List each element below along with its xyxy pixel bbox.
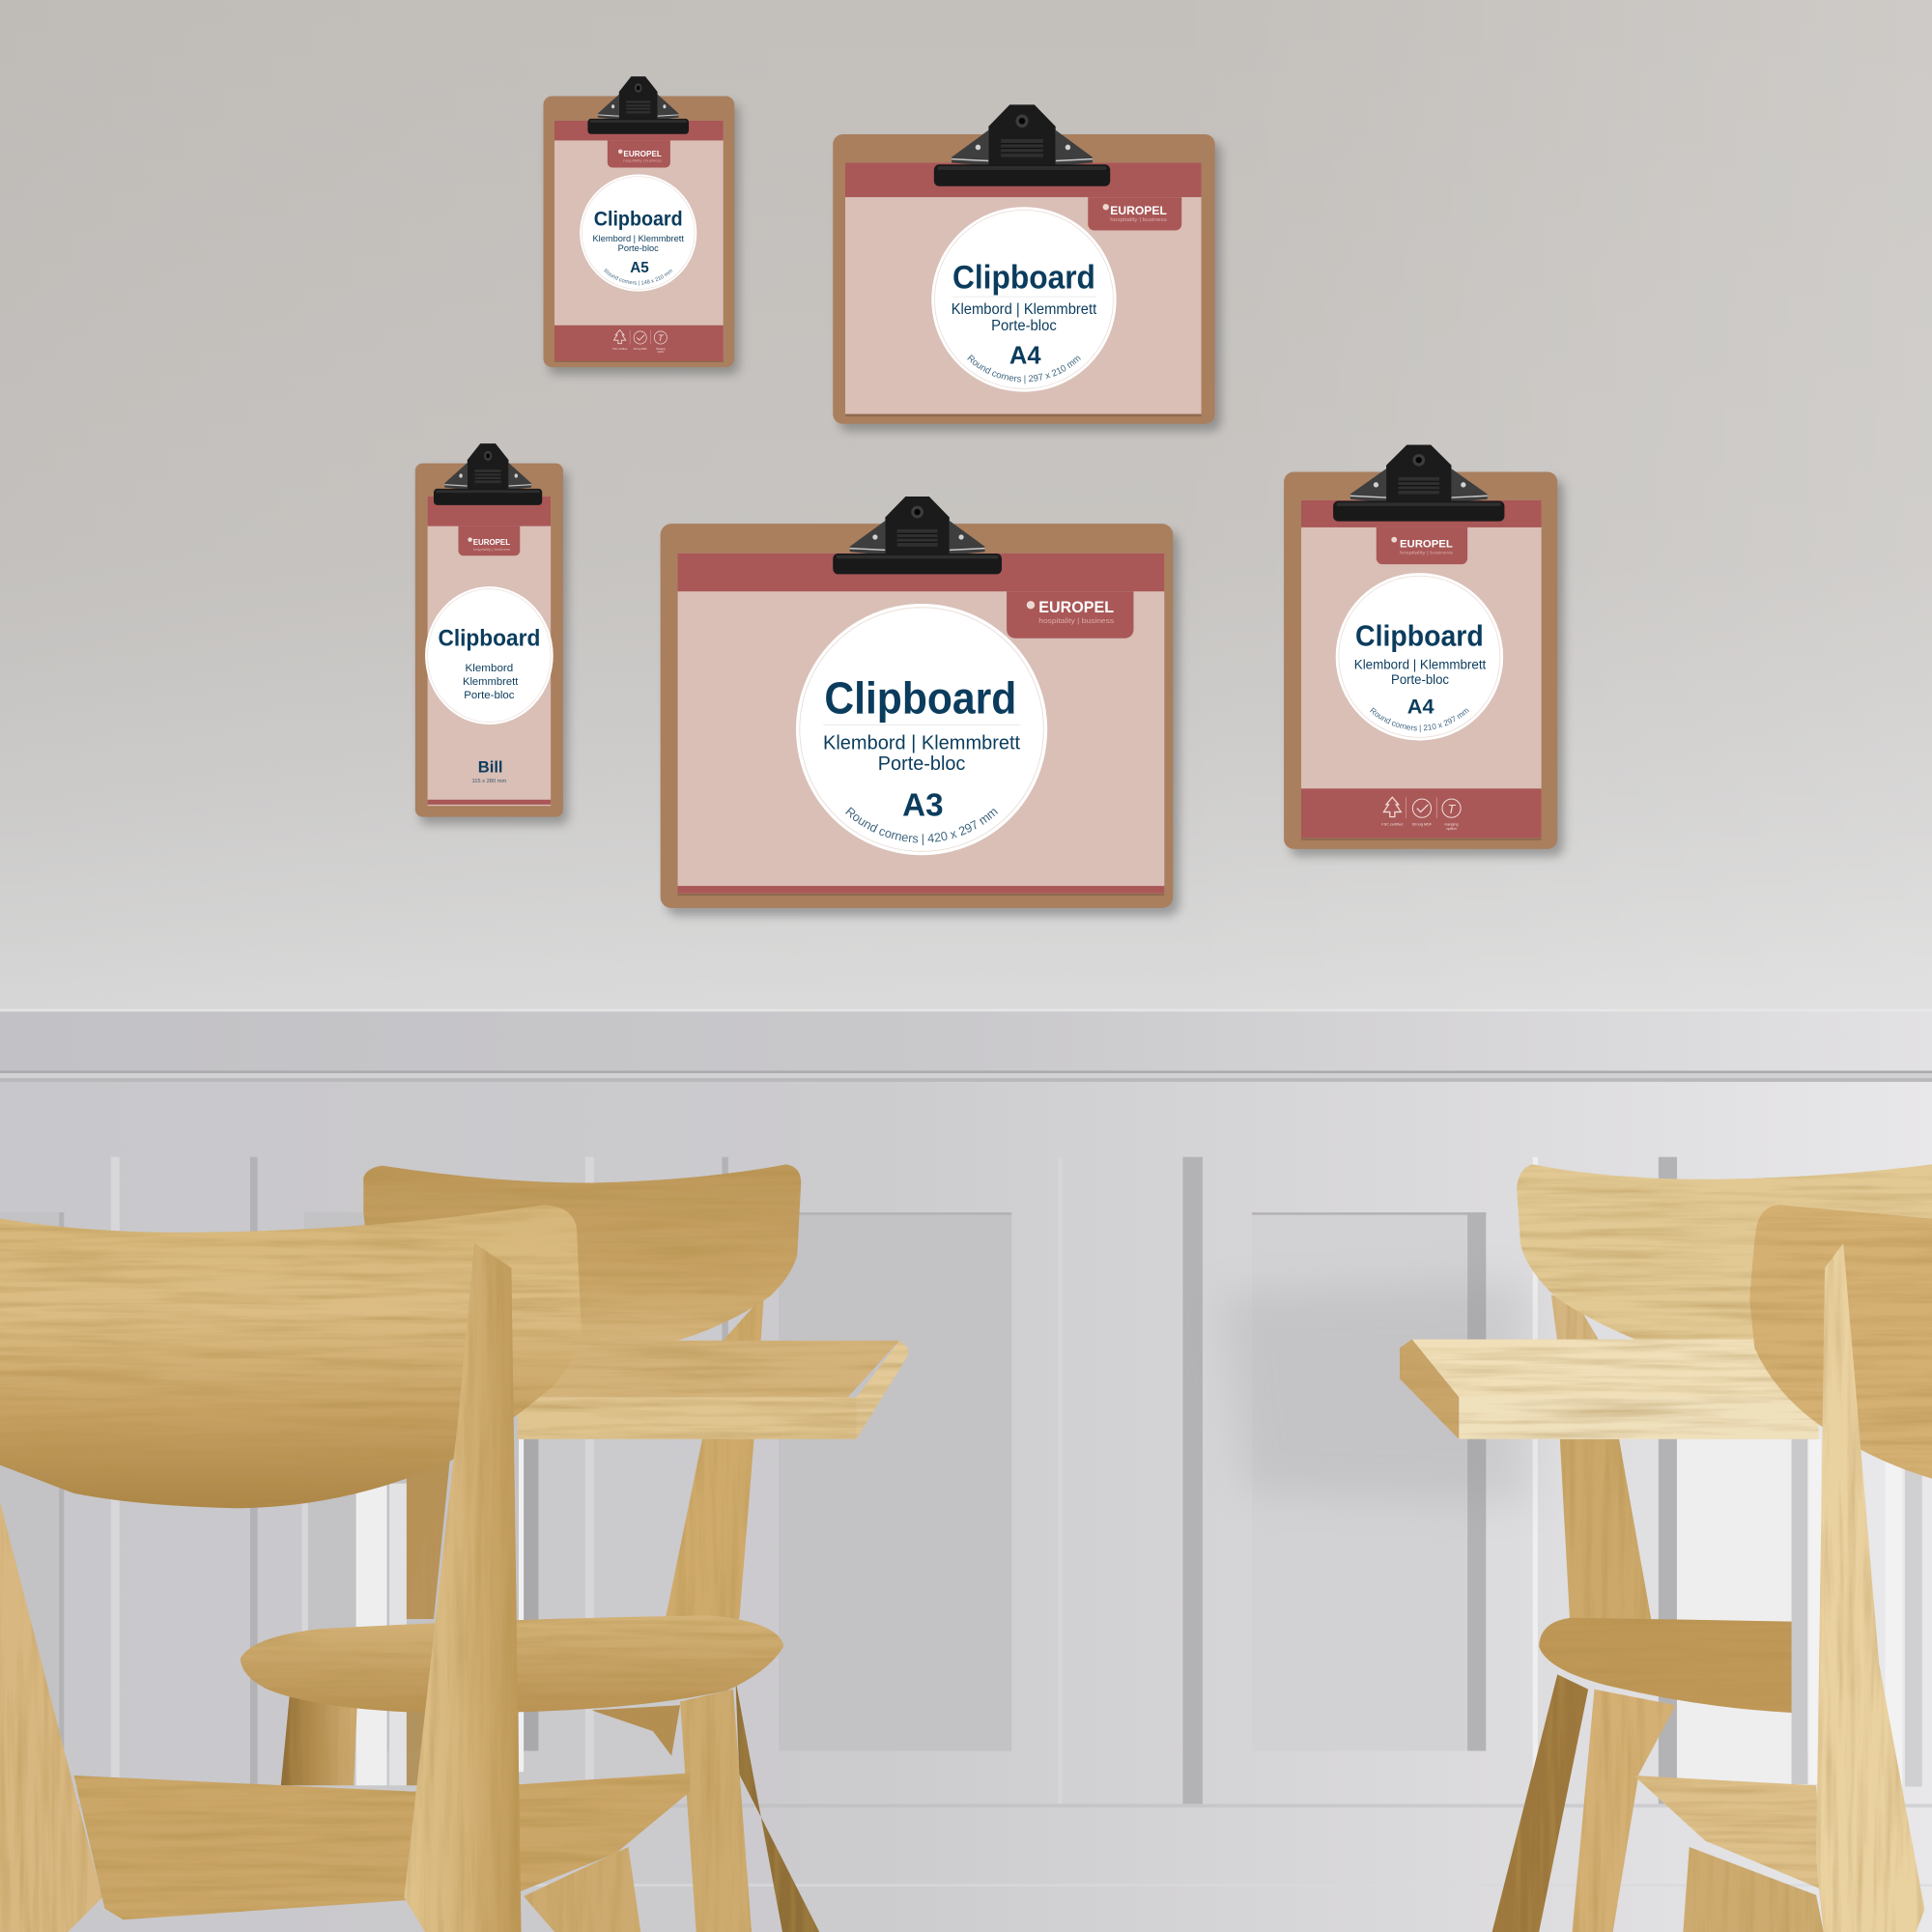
wall panels	[0, 1157, 1932, 1887]
board	[833, 134, 1221, 431]
logo tab	[1088, 197, 1181, 231]
certification icons	[612, 330, 667, 354]
clipboard: A3	[661, 497, 1184, 921]
label circle	[931, 207, 1117, 392]
label circle: Round corners | 148 x 210 mm	[604, 269, 672, 286]
certification icons: Strong MDF	[634, 347, 647, 351]
clip	[587, 76, 689, 134]
logo tab: hospitality | business	[473, 548, 510, 552]
back chair: seat	[241, 1615, 783, 1713]
label circle: Clipboard	[824, 673, 1016, 724]
board	[543, 96, 739, 375]
label circle: A4	[1407, 695, 1435, 719]
logo tab	[1377, 527, 1467, 564]
clipboard: A5	[543, 76, 744, 379]
table	[518, 1341, 908, 1439]
board	[415, 464, 568, 824]
clipboard: A4 landscape	[833, 104, 1226, 436]
back chair: seat	[1539, 1618, 1792, 1713]
label circle: Round corners | 210 x 297 mm	[1370, 707, 1469, 732]
label circle: Porte-bloc	[1391, 671, 1449, 687]
logo tab	[458, 526, 520, 555]
logo tab: EUROPEL	[1400, 538, 1453, 550]
back chair: rear legs	[1492, 1295, 1676, 1932]
wainscot panelling	[0, 1009, 1932, 1932]
logo tab: EUROPEL	[1038, 598, 1114, 616]
certification icons: FSC certified	[1381, 823, 1403, 827]
logo tab	[608, 140, 670, 167]
label circle: Porte-bloc	[464, 690, 515, 701]
label circle: Klembord | Klemmbrett	[593, 234, 684, 244]
board	[661, 524, 1179, 916]
label circle: A3	[902, 787, 944, 823]
white radiator bars	[356, 1439, 1922, 1786]
label circle: Klembord | Klemmbrett	[1354, 657, 1486, 672]
wall background	[0, 0, 1932, 1012]
logo tab	[1007, 591, 1133, 639]
front chair: side leg	[0, 1502, 102, 1932]
label circle: Round corners | 297 x 210 mm	[967, 355, 1081, 384]
certification icons: option	[1446, 827, 1457, 831]
label circle	[425, 586, 554, 724]
size label: 115 x 280 mm	[471, 779, 507, 784]
front chair: post	[1816, 1243, 1924, 1932]
rail moulding	[0, 1009, 1932, 1082]
logo tab: hospitality | business	[1038, 618, 1115, 625]
label circle: Klembord | Klemmbrett	[952, 301, 1097, 318]
certification icons: Hanging	[1444, 823, 1459, 827]
logo tab: hospitality | business	[1400, 550, 1454, 555]
label circle: Clipboard	[438, 625, 540, 650]
label circle: Porte-bloc	[878, 753, 965, 775]
paper	[1301, 500, 1542, 840]
label circle: Clipboard	[594, 208, 683, 230]
paper	[678, 554, 1164, 895]
certification icons: Hanging	[656, 347, 666, 351]
front chair: backrest	[0, 1205, 582, 1508]
board	[1284, 472, 1564, 856]
front chair: under seat leg	[524, 1847, 640, 1932]
certification icons: Strong MDF	[1412, 823, 1433, 827]
label circle	[1335, 573, 1503, 741]
paper	[845, 162, 1202, 416]
label circle: A5	[630, 260, 649, 276]
front chair: seat	[1634, 1776, 1824, 1890]
clipboard: A4 portrait	[1284, 444, 1569, 862]
table	[1400, 1339, 1819, 1439]
certification icons: option	[657, 350, 665, 354]
label circle: Klemmbrett	[463, 676, 519, 688]
label circle: Klembord	[466, 663, 513, 674]
logo tab: hospitality | business	[623, 159, 662, 163]
left furniture group	[0, 1164, 908, 1932]
label circle: Porte-bloc	[991, 318, 1057, 334]
table shadow on wall	[1220, 1282, 1528, 1503]
clipboard: Bill	[415, 443, 568, 824]
label circle: Klembord | Klemmbrett	[823, 733, 1020, 754]
logo tab: EUROPEL	[623, 149, 662, 158]
front chair: backrest	[1749, 1205, 1932, 1479]
clip	[833, 497, 1002, 574]
label circle	[796, 604, 1047, 856]
paper	[554, 121, 724, 362]
certification icons: T	[658, 333, 664, 343]
right furniture group	[1400, 1164, 1932, 1932]
front chair: post	[404, 1243, 522, 1932]
label circle: A4	[1009, 342, 1041, 369]
certification icons	[1381, 797, 1461, 831]
cap rail	[0, 1010, 1932, 1072]
clip	[934, 104, 1110, 186]
clip	[434, 443, 542, 505]
certification icons: FSC certified	[612, 347, 628, 351]
back chair: rear legs	[281, 1295, 819, 1932]
certification icons: T	[1448, 802, 1457, 816]
label circle: Round corners | 420 x 297 mm	[845, 807, 998, 846]
clip	[1333, 444, 1504, 522]
label circle: Porte-bloc	[618, 243, 659, 254]
back chair: backrest	[1517, 1164, 1932, 1355]
logo tab: hospitality | business	[1110, 217, 1167, 223]
front chair: seat	[74, 1773, 690, 1919]
logo tab: EUROPEL	[473, 537, 510, 547]
size label: Bill	[478, 758, 503, 777]
label circle: Clipboard	[1355, 619, 1484, 652]
label circle	[580, 174, 697, 292]
logo tab: EUROPEL	[1110, 204, 1167, 217]
back chair: backrest	[363, 1164, 801, 1355]
paper	[428, 497, 551, 806]
label circle: Clipboard	[952, 259, 1095, 296]
size label	[471, 758, 507, 784]
